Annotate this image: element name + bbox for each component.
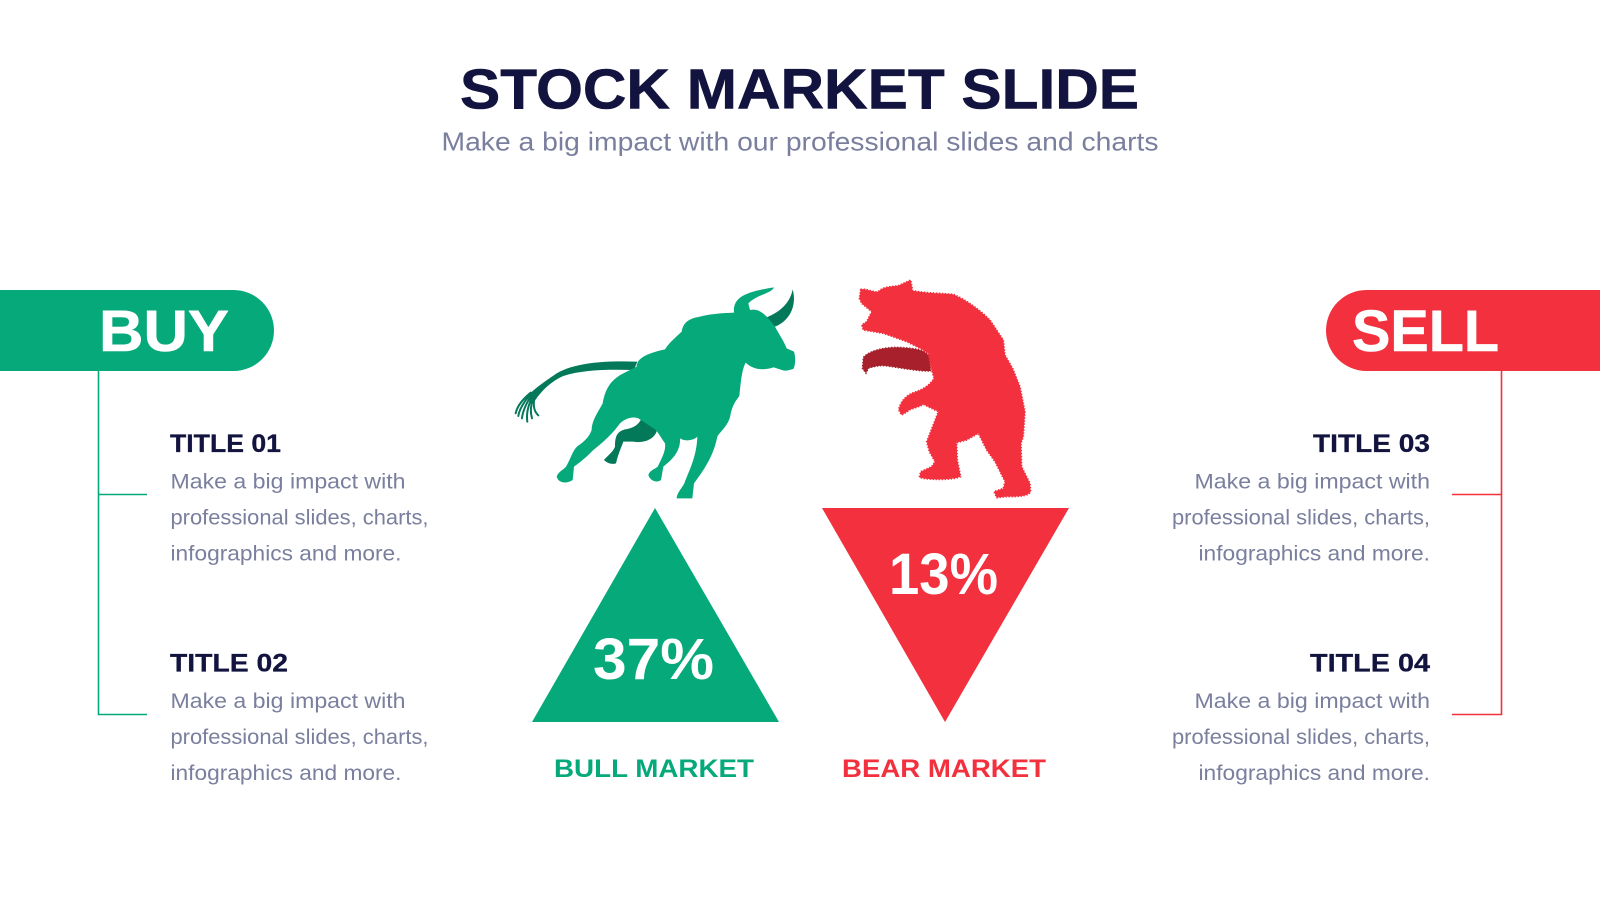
buy banner: [0, 290, 274, 371]
chart: bull triangle: [532, 508, 779, 722]
text block: title 04: TITLE 04: [1310, 650, 1430, 678]
subtitle: Make a big impact with our professional slides and charts: [442, 126, 1158, 156]
icon: bear silhouette: [859, 280, 1031, 498]
text block: title 03: professional slides, charts,: [1172, 506, 1430, 530]
label: bull market: BULL MARKET: [554, 755, 754, 783]
buy banner: BUY: [99, 299, 229, 364]
chart: bear triangle: 13%: [889, 542, 998, 607]
buy connector lines: [98, 371, 147, 714]
title: STOCK MARKET SLIDE: [460, 58, 1139, 122]
sell connector lines: [1452, 371, 1502, 714]
text block: title 01: TITLE 01: [170, 430, 281, 458]
text block: title 04: infographics and more.: [1198, 762, 1430, 785]
text block: title 01: professional slides, charts,: [170, 506, 428, 530]
icon: bull silhouette: [516, 287, 795, 498]
sell banner: SELL: [1352, 299, 1499, 364]
text block: title 03: infographics and more.: [1198, 542, 1430, 566]
text block: title 03: Make a big impact with: [1194, 470, 1430, 494]
text block: title 04: [1172, 650, 1430, 785]
text block: title 02: professional slides, charts,: [170, 726, 428, 749]
chart: bear triangle: [822, 508, 1069, 722]
panel: buy: [0, 290, 428, 785]
text block: title 04: professional slides, charts,: [1172, 726, 1430, 749]
text block: title 03: [1172, 430, 1430, 566]
text block: title 02: infographics and more.: [170, 762, 402, 785]
text block: title 01: Make a big impact with: [170, 470, 406, 494]
text block: title 04: Make a big impact with: [1194, 690, 1430, 713]
text block: title 02: Make a big impact with: [170, 690, 406, 713]
text block: title 02: TITLE 02: [170, 650, 288, 678]
panel: sell: [1172, 290, 1600, 785]
chart: bull triangle: 37%: [593, 627, 714, 692]
label: bear market: BEAR MARKET: [842, 755, 1046, 783]
text block: title 01: [170, 430, 428, 566]
text block: title 03: TITLE 03: [1313, 430, 1430, 458]
sell banner: [1326, 290, 1600, 371]
text block: title 01: infographics and more.: [170, 542, 402, 566]
text block: title 02: [170, 650, 428, 785]
